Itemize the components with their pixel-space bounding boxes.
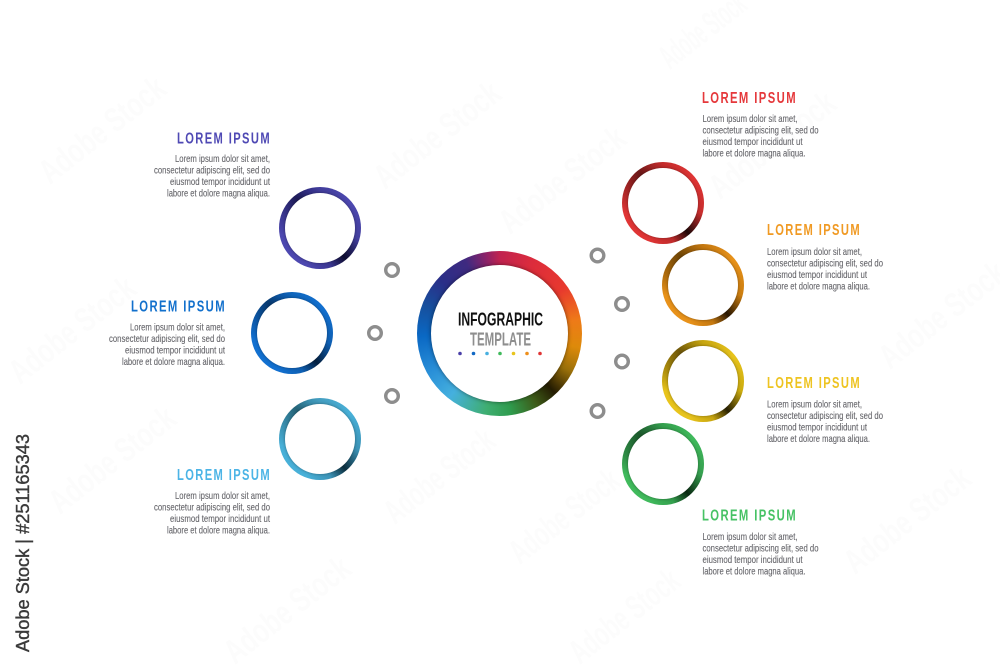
connector dots [369, 249, 628, 417]
watermark pattern: Adobe Stock [492, 119, 633, 241]
text block: yellow: eiusmod tempor incididunt ut [767, 422, 867, 434]
watermark pattern: Adobe Stock [562, 561, 687, 667]
stock credit: Adobe Stock | #251165343 [13, 434, 33, 652]
text block: blue: Lorem ipsum dolor sit amet, [130, 322, 225, 334]
text block: yellow [767, 375, 883, 445]
step ring: light blue [279, 398, 361, 480]
watermark pattern: Adobe Stock [702, 84, 843, 206]
watermark pattern: Adobe Stock [2, 269, 143, 391]
text block: light blue: labore et dolore magna aliqua. [167, 524, 270, 536]
text block: purple: consectetur adipiscing elit, sed do [154, 164, 270, 176]
text block: red [702, 90, 819, 160]
text block: purple: eiusmod tempor incididunt ut [170, 176, 270, 188]
watermark pattern: Adobe Stock [367, 74, 508, 196]
center title: INFOGRAPHIC [458, 308, 543, 330]
text block: orange: eiusmod tempor incididunt ut [767, 269, 867, 281]
center title: TEMPLATE [470, 328, 531, 350]
text block: green: LOREM IPSUM [702, 508, 797, 524]
text block: green: labore et dolore magna aliqua. [702, 566, 806, 578]
text block: yellow: LOREM IPSUM [767, 375, 861, 392]
text block: red: labore et dolore magna aliqua. [702, 148, 806, 160]
central ring [417, 251, 582, 416]
text block: red: LOREM IPSUM [702, 90, 797, 107]
text block: red: Lorem ipsum dolor sit amet, [702, 113, 798, 125]
text block: green: Lorem ipsum dolor sit amet, [702, 531, 798, 543]
text block: green: eiusmod tempor incididunt ut [702, 554, 803, 566]
text block: blue: consectetur adipiscing elit, sed do [109, 333, 225, 345]
text block: orange: LOREM IPSUM [767, 222, 861, 239]
text block: orange: Lorem ipsum dolor sit amet, [767, 246, 862, 258]
step ring: yellow [662, 340, 744, 422]
center title [458, 308, 543, 350]
text block: yellow: consectetur adipiscing elit, sed do [767, 410, 883, 422]
watermark pattern: Adobe Stock [42, 399, 183, 521]
watermark pattern: Adobe Stock [377, 421, 502, 531]
watermark pattern: Adobe Stock [32, 69, 173, 191]
step ring: purple [279, 187, 361, 269]
text block: light blue: eiusmod tempor incididunt ut [170, 513, 270, 525]
text block: purple: labore et dolore magna aliqua. [167, 188, 270, 200]
step ring: blue [251, 292, 333, 374]
watermark pattern: Adobe Stock [502, 461, 627, 571]
text block: light blue: LOREM IPSUM [177, 467, 271, 484]
text block: blue [109, 298, 226, 368]
step ring: orange [662, 244, 744, 326]
text block: orange: labore et dolore magna aliqua. [767, 280, 870, 292]
text block: blue: LOREM IPSUM [131, 298, 226, 316]
text block: yellow: Lorem ipsum dolor sit amet, [767, 398, 862, 410]
text block: green [702, 508, 819, 578]
text block: green: consectetur adipiscing elit, sed do [702, 542, 819, 554]
text block: yellow: labore et dolore magna aliqua. [767, 433, 870, 445]
text block: purple: LOREM IPSUM [177, 130, 271, 148]
text block: light blue: consectetur adipiscing elit, sed do [154, 502, 270, 514]
text block: light blue: Lorem ipsum dolor sit amet, [175, 490, 270, 502]
text block: red: eiusmod tempor incididunt ut [702, 136, 803, 148]
step ring: red [622, 162, 704, 244]
text block: orange: consectetur adipiscing elit, sed do [767, 258, 883, 270]
step ring: green [622, 423, 704, 505]
text block: blue: labore et dolore magna aliqua. [122, 356, 225, 368]
text block: purple: Lorem ipsum dolor sit amet, [175, 153, 270, 165]
text block: orange [767, 222, 883, 292]
text block: purple [154, 130, 271, 200]
text block: light blue [154, 467, 271, 536]
text block: red: consectetur adipiscing elit, sed do [702, 124, 819, 136]
center color dots [458, 352, 542, 355]
watermark pattern: Adobe Stock [217, 549, 358, 667]
text block: blue: eiusmod tempor incididunt ut [125, 344, 225, 356]
